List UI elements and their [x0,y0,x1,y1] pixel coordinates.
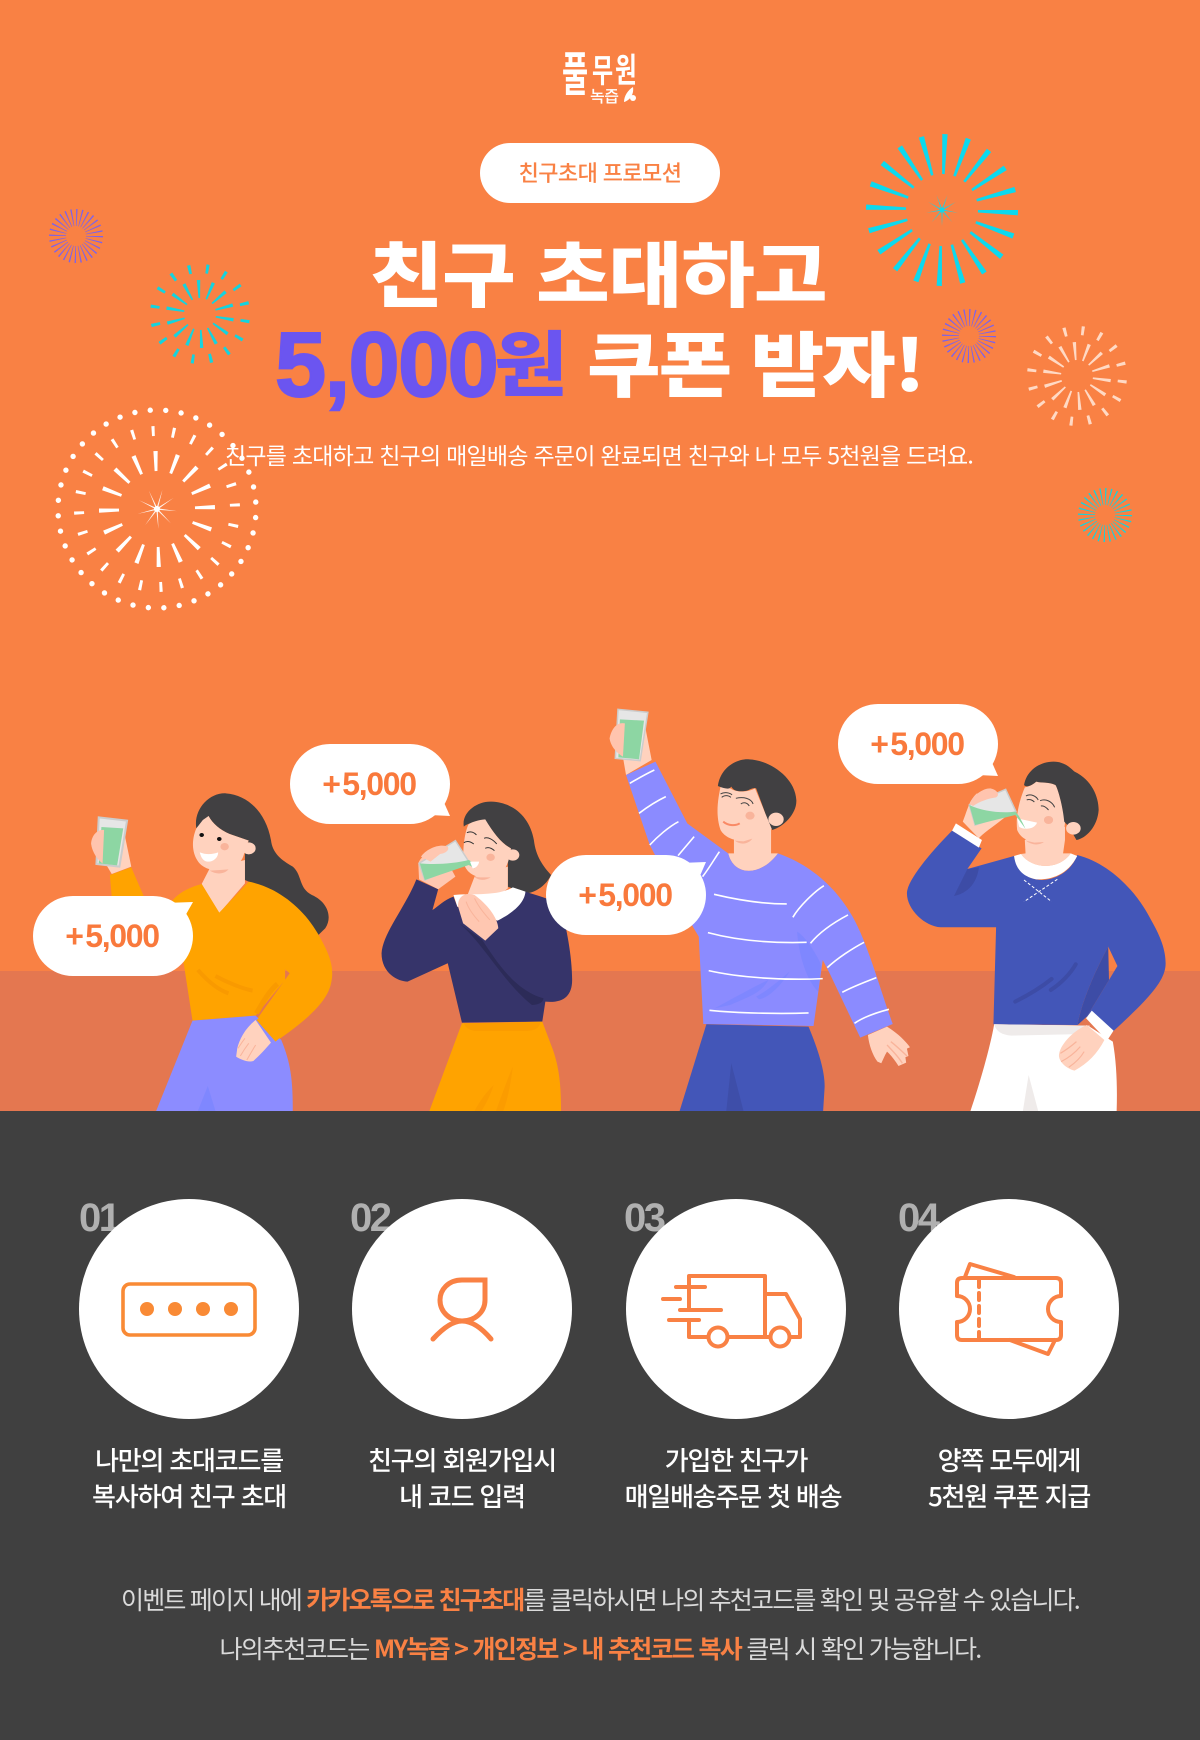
logo: 풀무원 녹즙: 원 [615,44,637,92]
step 2: 내 코드 입력 [399,1477,525,1514]
person: woman in navy sweater [382,802,572,1111]
speech bubble 4: + 5,000 [870,726,964,762]
step 1: 복사하여 친구 초대 [92,1477,286,1514]
icon: code input [123,1284,255,1335]
icon: delivery truck [663,1276,800,1346]
firework: medium teal left [149,263,251,365]
firework: large white [51,403,263,615]
speech bubble 3: + 5,000 [578,877,672,913]
logo: 풀무원 녹즙 [562,38,637,107]
title line 1: 친구 초대하고 [370,218,826,322]
step 2: 친구의 회원가입시 [368,1441,556,1478]
person: man in blue sweater [907,762,1166,1111]
icon: coupon tickets [957,1264,1061,1354]
step 2 [350,1196,572,1514]
person: woman in orange sweater [91,793,332,1111]
promotion pill [480,143,720,203]
logo: 풀무원 녹즙: 무 [592,45,613,92]
title line 2: 쿠폰 받자! [587,308,924,412]
step 1: 01 [79,1196,121,1240]
person: man in striped sweater [610,709,910,1111]
speech bubble 1: + 5,000 [65,918,159,954]
note line 1: 이벤트 페이지 내에 카카오톡으로 친구초대를 클릭하시면 나의 추천코드를 확인 및 공유할 수 있습니다. [121,1581,1080,1617]
note line 2: 나의추천코드는 MY녹즙 > 개인정보 > 내 추천코드 복사 클릭 시 확인 가능합니다. [219,1630,981,1666]
step 4: 5천원 쿠폰 지급 [928,1477,1090,1514]
icon: person [433,1280,491,1339]
speech bubble 2 [290,744,450,824]
step 3: 매일배송주문 첫 배송 [625,1477,842,1514]
speech bubble 2: + 5,000 [322,766,416,802]
title line 2 won: 원 [494,307,568,411]
firework: small teal right [1086,496,1124,534]
firework: medium peach right [1028,327,1126,425]
step 2: 02 [350,1196,391,1240]
speech bubble 4 [838,704,998,784]
promotion pill: 친구초대 프로모션 [519,156,681,188]
logo: 풀무원 녹즙: 녹즙 [590,83,618,107]
step 4: 양쪽 모두에게 [938,1441,1080,1478]
subtitle: 친구를 초대하고 친구의 매일배송 주문이 완료되면 친구와 나 모두 5천원을 드려요. [225,437,973,471]
speech bubble 3 [546,855,706,935]
title line 2 amount: 5,000 [275,314,497,416]
speech bubble 1 [33,896,193,976]
firework: large teal [886,154,998,266]
step 1 [79,1196,299,1514]
step 4 [898,1196,1119,1514]
step 4: 04 [898,1196,941,1240]
logo: 풀무원 녹즙: 풀 [562,38,588,106]
firework: small purple right [950,318,988,354]
step 3 [624,1196,846,1514]
step 1: 나만의 초대코드를 [95,1441,283,1478]
firework: small purple left [58,218,94,254]
step 3: 가입한 친구가 [665,1441,808,1478]
step 3: 03 [624,1196,665,1240]
